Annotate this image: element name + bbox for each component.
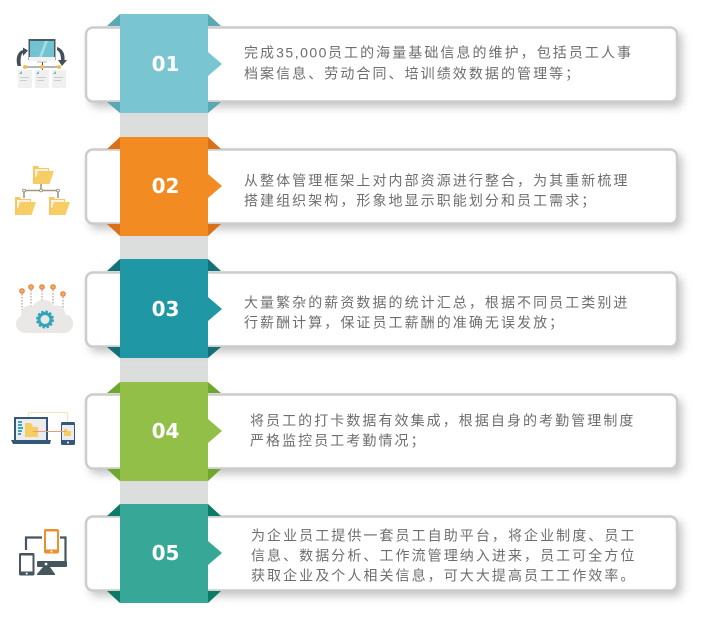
number block: step 03: 03 <box>152 297 179 321</box>
text: step 01 description: 档案信息、劳动合同、培训绩效数据的管理等； <box>244 66 581 82</box>
text: step 05 description: 为企业员工提供一套员工自助平台，将企业制度、员工 <box>251 528 636 544</box>
panel: step 02 card <box>86 150 682 229</box>
number block: step 05 <box>120 504 222 603</box>
step 03 <box>16 259 682 358</box>
text: step 02 description: 搭建组织架构，形象地显示职能划分和员工需求； <box>244 192 597 210</box>
ribbon: step 02 folds <box>107 137 221 236</box>
vertical connector strip <box>120 100 208 520</box>
text: step 05 description: 获取企业及个人相关信息，可大大提高员工工作效率。 <box>251 568 636 584</box>
number block: step 04 <box>120 382 222 481</box>
ribbon: step 05 folds <box>107 504 221 603</box>
text: step 04 description: 将员工的打卡数据有效集成，根据自身的考勤管理制度 <box>250 412 635 428</box>
text: step 05 description: 信息、数据分析、工作流管理纳入进来，员工可全方位 <box>251 548 636 564</box>
number block: step 03 <box>120 259 222 358</box>
text: step 04 description: 严格监控员工考勤情况； <box>250 432 427 450</box>
icon: laptop and phone sync <box>11 412 75 445</box>
step 05 <box>19 504 682 603</box>
number block: step 04: 04 <box>152 419 179 443</box>
panel: step 01 card <box>86 28 682 107</box>
text: step 01 description <box>244 44 633 82</box>
step 04 <box>11 382 682 481</box>
text: step 01 description: 完成35,000员工的海量基础信息的维护，包括员工人事 <box>244 44 633 60</box>
step 02 <box>15 137 682 236</box>
number block: step 02 <box>120 137 222 236</box>
text: step 02 description <box>244 172 629 210</box>
ribbon: step 01 folds <box>107 14 221 113</box>
step 01 <box>17 14 682 113</box>
ribbon: step 04 folds <box>107 382 221 481</box>
panel: step 05 card <box>86 516 682 596</box>
text: step 03 description: 大量繁杂的薪资数据的统计汇总，根据不同员工类别进 <box>244 294 629 310</box>
text: step 03 description: 行薪酬计算，保证员工薪酬的准确无误发放； <box>244 314 565 332</box>
text: step 03 description <box>244 294 629 332</box>
text: step 05 description <box>251 528 636 584</box>
text: step 02 description: 从整体管理框架上对内部资源进行整合，为其重新梳理 <box>244 172 629 188</box>
panel: step 03 card <box>86 272 682 352</box>
icon: cloud with gear <box>16 285 73 333</box>
number block: step 01: 01 <box>152 52 179 76</box>
text: step 04 description <box>250 412 635 450</box>
number block: step 05: 05 <box>152 541 179 565</box>
icon: computer with documents <box>17 39 67 88</box>
panel: step 04 card <box>86 394 682 474</box>
icon: folder hierarchy <box>15 166 70 215</box>
icon: multiple devices <box>19 529 67 576</box>
number block: step 02: 02 <box>152 174 179 198</box>
number block: step 01 <box>120 14 222 113</box>
ribbon: step 03 folds <box>107 259 221 358</box>
